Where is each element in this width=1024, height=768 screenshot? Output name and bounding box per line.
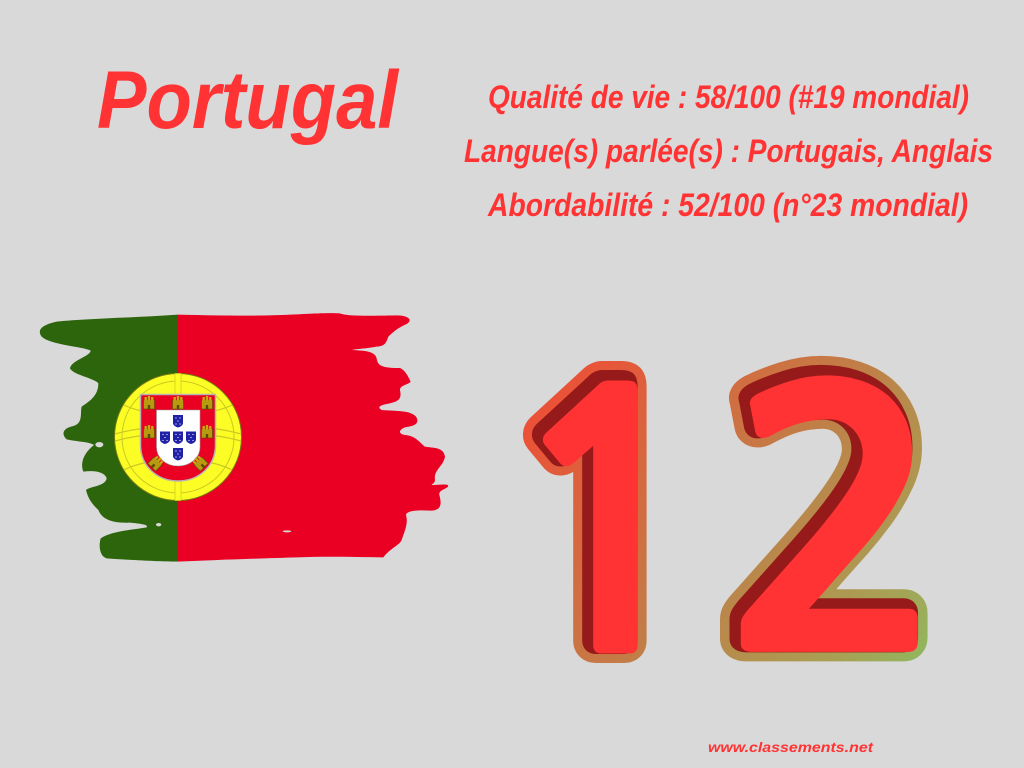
digit 1 gradient outline: 1: [496, 351, 708, 697]
flag coat of arms: [114, 374, 242, 500]
flag brush fields: [40, 313, 448, 562]
fact: quality of life: Qualité de vie : 58/100 (#19 mondial): [488, 79, 969, 115]
digit 2 gradient outline: 2: [718, 347, 942, 695]
fact: affordability: Abordabilité : 52/100 (n°23 mondial): [487, 187, 968, 223]
icon: brushed Portuguese flag: [40, 313, 448, 562]
digit 1 shadow: 1: [496, 351, 708, 697]
digit 2 fill: 2: [724, 352, 947, 700]
title: Portugal: [97, 55, 400, 146]
country facts: [464, 79, 993, 223]
digit 1 fill: 1: [502, 356, 714, 702]
website footer: www.classements.net: [708, 739, 875, 755]
rank number 12: [496, 347, 947, 702]
digit 2 shadow: 2: [718, 347, 942, 695]
